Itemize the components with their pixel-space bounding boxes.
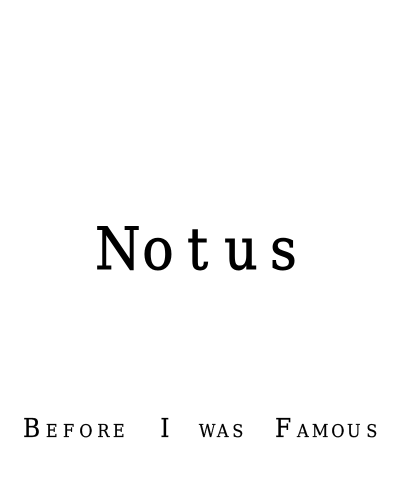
subtitle: WAS [199, 421, 243, 442]
subtitle: EFORE [46, 421, 125, 442]
subtitle: B [23, 413, 40, 443]
subtitle [23, 413, 377, 443]
subtitle: I [160, 413, 169, 443]
subtitle: F [275, 413, 291, 443]
subtitle: AMOUS [296, 421, 377, 442]
title: Notus [95, 216, 297, 284]
